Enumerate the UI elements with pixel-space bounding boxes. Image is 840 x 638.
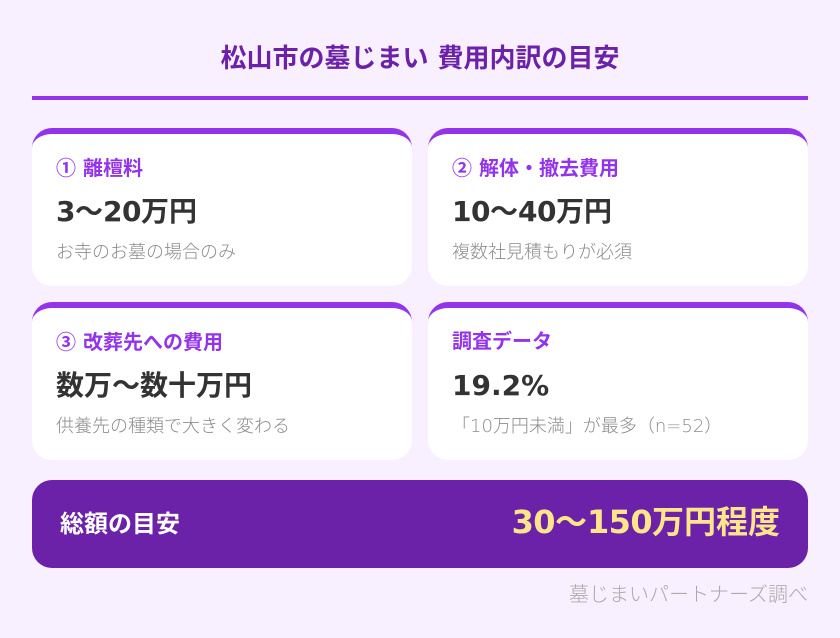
note: 複数社見積もりが必須: [452, 242, 632, 263]
value: 3〜20万円: [56, 195, 197, 228]
source note: 墓じまいパートナーズ調べ: [569, 582, 808, 606]
panel: total banner: [32, 480, 808, 568]
label: 調査データ: [452, 329, 552, 353]
title underline: [32, 96, 808, 100]
panel: 調査データ: [428, 302, 808, 460]
total value: 30〜150万円程度: [512, 503, 780, 541]
note: お寺のお墓の場合のみ: [56, 242, 236, 263]
note: 供養先の種類で大きく変わる: [56, 416, 290, 437]
label: ① 離檀料: [56, 152, 143, 181]
value: 10〜40万円: [452, 195, 612, 228]
title: 松山市の墓じまい 費用内訳の目安: [220, 44, 620, 74]
panel: 解体・撤去費用: [428, 128, 808, 286]
note: 「10万円未満」が最多（n=52）: [452, 416, 722, 437]
total label: 総額の目安: [60, 510, 180, 538]
panel: 離檀料: [32, 128, 412, 286]
panel: 改葬先への費用: [32, 302, 412, 460]
value: 数万〜数十万円: [56, 369, 252, 402]
value: 19.2%: [452, 369, 549, 402]
label: ③ 改葬先への費用: [56, 326, 223, 355]
label: ② 解体・撤去費用: [452, 152, 619, 181]
